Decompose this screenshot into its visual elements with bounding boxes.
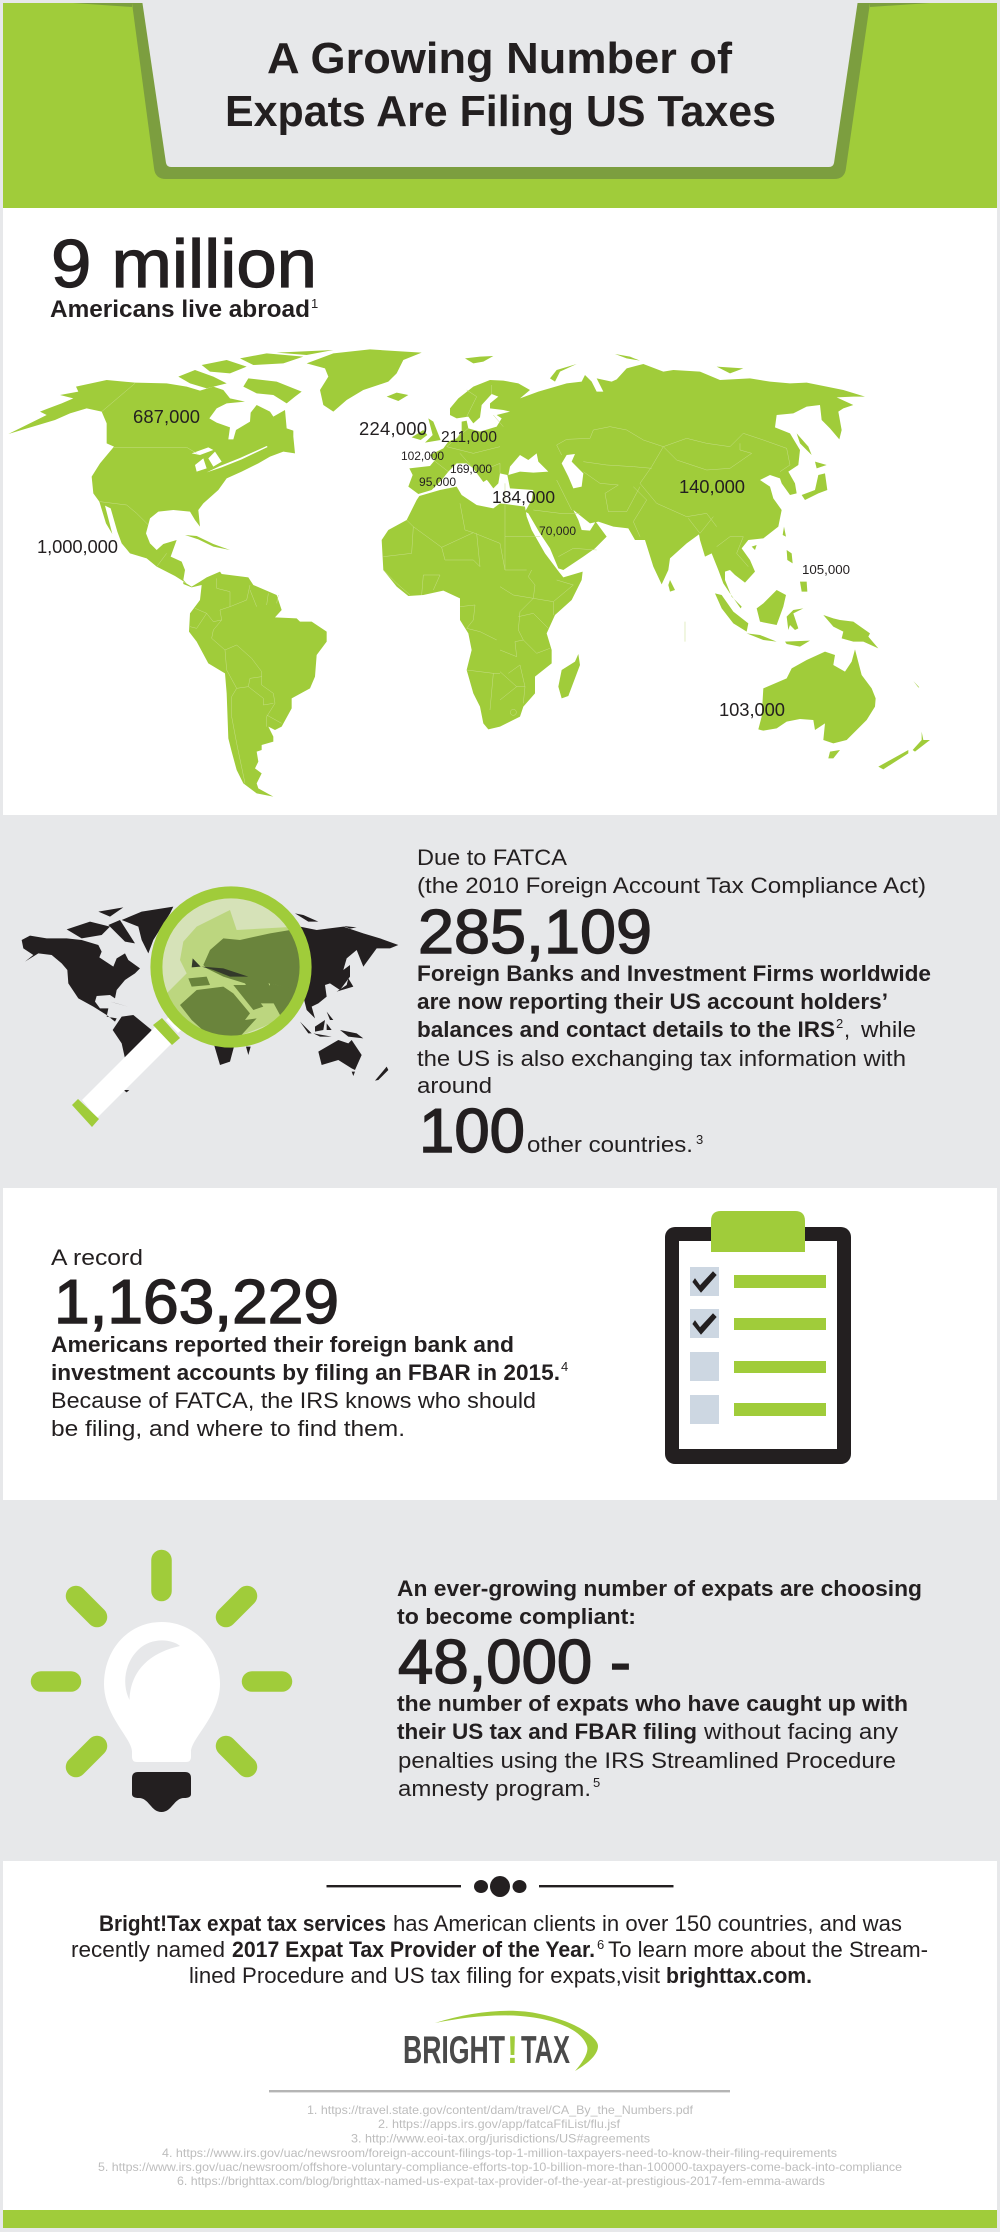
map population labels: 105,000 [802, 562, 850, 577]
FATCA intro text: Due to FATCA [417, 845, 567, 870]
FBAR text: 1,163,229 [54, 1268, 339, 1337]
sources rule [269, 2090, 730, 2092]
statistic: 48,000: 48,000 - [398, 1628, 631, 1697]
map population labels: 102,000 [401, 449, 444, 463]
FBAR text: investment accounts by filing an FBAR in 2015. [51, 1360, 560, 1385]
icon: clipboard checklist [665, 1211, 851, 1464]
panel: header banner [3, 0, 997, 208]
logo: Bright!Tax [403, 2011, 598, 2072]
dark world map [22, 907, 398, 1092]
map population labels: 184,000 [492, 487, 555, 507]
FATCA intro text [417, 845, 926, 898]
map population labels: 140,000 [679, 476, 745, 497]
FBAR text: A record [51, 1245, 143, 1270]
title: Expats Are Filing US Taxes [225, 87, 776, 136]
compliance intro text [397, 1576, 922, 1629]
map population labels: 169,000 [450, 462, 492, 476]
title [225, 34, 776, 136]
source footnotes: 6. https://brighttax.com/blog/brighttax-named-us-expat-tax-provider-of-the-year-at-prestigious-2017-fem-emma-awards [177, 2174, 825, 2188]
statistic: 100 other countries [419, 1097, 703, 1166]
compliance body text [397, 1691, 908, 1801]
closing text: recently named [71, 1937, 225, 1962]
magnifier handle [72, 1010, 188, 1127]
compliance body text: their US tax and FBAR filing [397, 1719, 697, 1744]
map population labels: 1,000,000 [37, 536, 118, 557]
source footnotes: 2. https://apps.irs.gov/app/fatcaFfiList/flu.jsf [378, 2117, 621, 2131]
world map [8, 349, 930, 797]
panel: Bright!Tax closing section [3, 1861, 997, 2210]
FBAR text: 4 [561, 1359, 568, 1374]
closing text: brighttax.com. [666, 1963, 812, 1988]
map population labels: 211,000 [441, 429, 497, 446]
FATCA intro text: (the 2010 Foreign Account Tax Compliance Act) [417, 873, 926, 898]
compliance body text: penalties using the IRS Streamlined Procedure [398, 1748, 896, 1773]
divider with dots [326, 1876, 674, 1897]
panel: FATCA section [22, 850, 930, 1154]
compliance intro text: to become compliant: [397, 1604, 636, 1629]
map population labels: 70,000 [539, 524, 576, 538]
panel: world map section [3, 208, 997, 815]
FATCA body text: while [860, 1017, 916, 1042]
FATCA body text [417, 961, 931, 1098]
magnifier lens [156, 892, 307, 1043]
source footnotes: 1. https://travel.state.gov/content/dam/travel/CA_By_the_Numbers.pdf [307, 2103, 694, 2117]
source footnotes [98, 2103, 902, 2188]
title: A Growing Number of [267, 34, 732, 83]
icon: light bulb with rays [41, 1560, 282, 1812]
compliance body text: the number of expats who have caught up with [397, 1691, 908, 1716]
statistic: 100 other countries: other countries. [527, 1132, 693, 1157]
inland seas and lakes [192, 446, 583, 488]
map population labels: 95,000 [419, 475, 456, 489]
logo: Bright!Tax: TAX [521, 2029, 570, 2072]
compliance body text: 5 [593, 1775, 600, 1790]
FATCA body text: are now reporting their US account holders’ [417, 989, 888, 1014]
icon: dark world map with magnifying glass [22, 892, 398, 1127]
closing text [71, 1911, 928, 1988]
closing text: Bright!Tax expat tax services [99, 1911, 386, 1936]
statistic: 100 other countries: 3 [696, 1132, 703, 1147]
compliance body text: without facing any [703, 1719, 898, 1744]
FATCA body text: around [417, 1073, 492, 1098]
compliance body text: amnesty program. [398, 1776, 591, 1801]
map population labels [37, 406, 850, 720]
FBAR text [51, 1245, 568, 1441]
FATCA body text: balances and contact details to the IRS [417, 1017, 835, 1042]
headline: 9 million: 1 [311, 296, 318, 311]
statistic: 100 other countries: 100 [419, 1097, 525, 1166]
FATCA body text: Foreign Banks and Investment Firms worldwide [417, 961, 931, 986]
FATCA body text: 2 [836, 1016, 843, 1031]
FATCA body text: , [844, 1017, 850, 1042]
headline: 9 million: Americans live abroad [50, 296, 310, 323]
footer bar [3, 2210, 997, 2228]
statistic: 285,109: 285,109 [418, 898, 652, 967]
source footnotes: 3. http://www.eoi-tax.org/jurisdictions/US#agreements [351, 2132, 650, 2146]
closing text: To learn more about the Stream- [608, 1937, 928, 1962]
country borders [100, 383, 790, 783]
panel: FBAR record section [3, 1188, 997, 1500]
FBAR text: Americans reported their foreign bank and [51, 1332, 514, 1357]
source footnotes: 5. https://www.irs.gov/uac/newsroom/offshore-voluntary-compliance-efforts-top-10-billion-more-than-100000-taxpayers-come-back-into-compliance [98, 2160, 902, 2174]
closing text: lined Procedure and US tax filing for expats,visit [189, 1963, 660, 1988]
map population labels: 224,000 [359, 418, 427, 439]
map population labels: 103,000 [719, 699, 785, 720]
compliance intro text: An ever-growing number of expats are choosing [397, 1576, 922, 1601]
map population labels: 687,000 [133, 406, 200, 427]
closing text: has American clients in over 150 countries, and was [393, 1911, 902, 1936]
closing text: 2017 Expat Tax Provider of the Year. [232, 1937, 595, 1962]
panel: compliance section [0, 1500, 1000, 1861]
logo: Bright!Tax: BRIGHT [403, 2029, 505, 2072]
FATCA body text: the US is also exchanging tax information with [417, 1046, 906, 1071]
headline: 9 million: 9 million [51, 226, 317, 302]
source footnotes: 4. https://www.irs.gov/uac/newsroom/foreign-account-filings-top-1-million-taxpayers-need-to-know-their-filing-requirements [162, 2146, 837, 2160]
closing text: 6 [597, 1937, 604, 1952]
FBAR text: be filing, and where to find them. [51, 1416, 405, 1441]
FBAR text: Because of FATCA, the IRS knows who should [51, 1388, 536, 1413]
logo: Bright!Tax: ! [507, 2029, 518, 2072]
